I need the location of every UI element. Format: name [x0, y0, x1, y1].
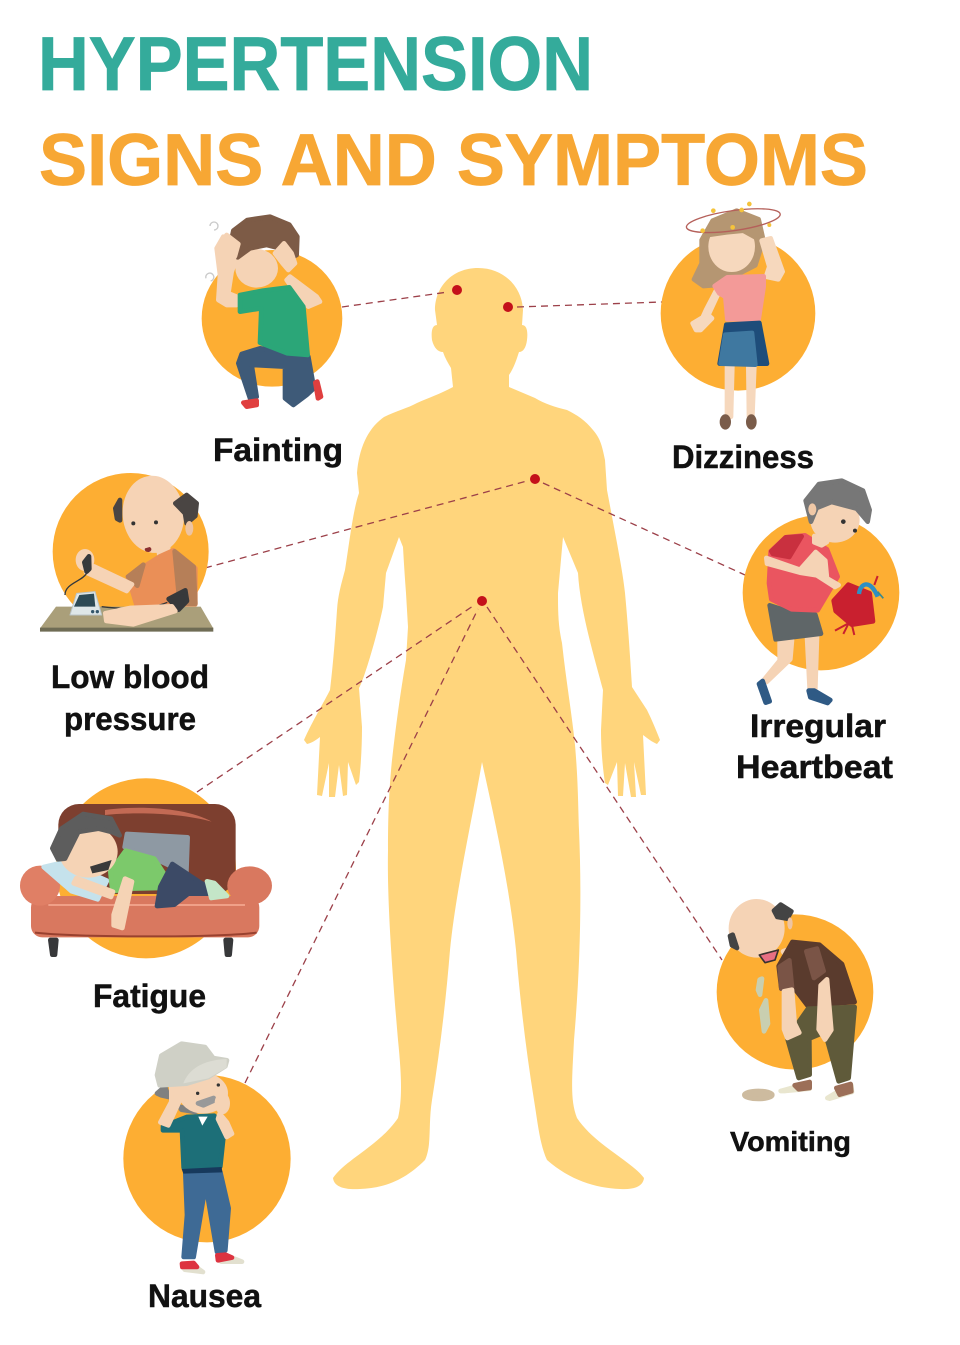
label: low blood pressure [51, 659, 209, 737]
title [38, 22, 868, 201]
label: low blood pressure: pressure [64, 701, 196, 737]
low blood pressure illustration [40, 473, 213, 632]
body silhouette [304, 268, 660, 1189]
nausea illustration [123, 1044, 291, 1272]
vomiting illustration [717, 899, 873, 1099]
symptom points [452, 285, 540, 606]
fatigue illustration [20, 778, 272, 958]
label: vomiting: Vomiting [730, 1126, 851, 1157]
irregular heartbeat illustration [743, 481, 899, 703]
label: low blood pressure: Low blood [51, 659, 209, 695]
label: nausea: Nausea [148, 1278, 261, 1314]
label: fainting: Fainting [213, 432, 343, 468]
label: irregular heartbeat [736, 708, 893, 785]
title: SIGNS AND SYMPTOMS [39, 120, 868, 201]
label: irregular heartbeat: Irregular [750, 708, 886, 744]
label: irregular heartbeat: Heartbeat [736, 749, 893, 785]
dizziness illustration [661, 202, 815, 430]
fainting illustration [202, 217, 342, 407]
label: dizziness: Dizziness [672, 439, 814, 475]
title: HYPERTENSION [38, 22, 593, 107]
label: fatigue: Fatigue [93, 978, 206, 1014]
dashed connector lines [197, 292, 745, 1083]
